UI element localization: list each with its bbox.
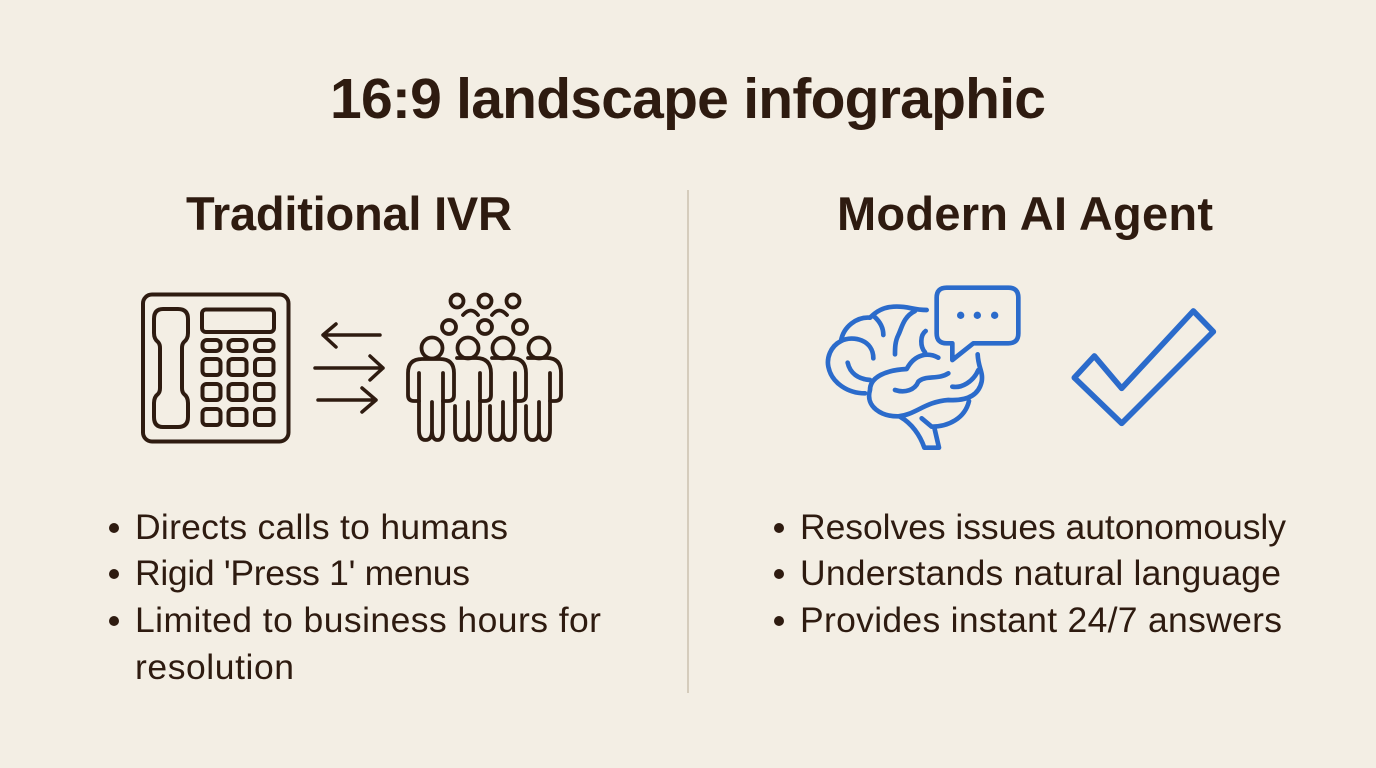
panel: modern AI agent [774,187,1286,640]
list: traditional IVR limitations: Directs calls to humans [135,507,508,547]
icon: crowd of people [408,294,561,440]
divider [687,190,689,693]
icon: desk phone [143,294,288,442]
icon: brain with speech bubble [828,288,1018,448]
list: AI agent benefits [774,507,1286,640]
list: AI agent benefits: Provides instant 24/7 answers [800,600,1282,640]
icon: routing arrows [315,324,383,412]
list: traditional IVR limitations: Limited to business hours for [135,600,601,640]
list: traditional IVR limitations [109,507,601,687]
list: AI agent benefits: Understands natural language [800,553,1281,593]
list: traditional IVR limitations: Rigid 'Press 1' menus [135,553,470,593]
icon: check mark [1074,311,1213,423]
heading: Modern AI Agent: Modern AI Agent [837,187,1213,240]
heading: Traditional IVR: Traditional IVR [186,187,512,240]
title: 16:9 landscape infographic [330,67,1046,131]
panel: traditional IVR [109,187,601,687]
list: AI agent benefits: Resolves issues autonomously [800,507,1286,547]
list: traditional IVR limitations: resolution [135,647,294,687]
